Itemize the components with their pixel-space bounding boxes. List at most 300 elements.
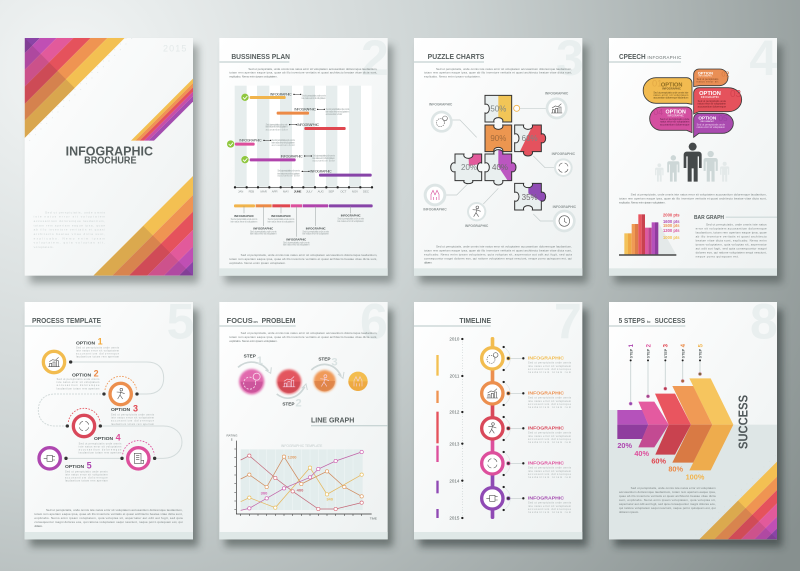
bar graph heading: BAR GRAPH [694, 215, 724, 221]
closing text: consequuntur magni dolores eos, qui ratione voluptatem sequi nesciunt, neque porro quisquam est, qui [424, 256, 572, 260]
speech bubble 2: OPTION [698, 70, 713, 75]
heading: PUZZLE CHARTS [428, 52, 484, 61]
winding path [38, 362, 182, 458]
speech bubble 4: accusantium doloremque [660, 123, 690, 126]
puzzle piece 60% [515, 124, 547, 157]
cover text block: voluptatem. [34, 245, 54, 249]
heading [619, 52, 681, 61]
speech bubble 2 [694, 69, 729, 87]
option 4 text: Sed ut perspiciatis unde omnis [79, 443, 122, 446]
speech bubble 1: accusantium doloremque laudantium [653, 97, 688, 100]
cover title: INFOGRAPHIC [66, 143, 153, 158]
cover text block: voluptatem, quia voluptas sit, [34, 241, 105, 245]
value labels [261, 454, 334, 502]
gantt annotations: accusantium dolor [266, 128, 288, 131]
segmented bar with callouts: INFOGRAPHIC [253, 226, 273, 230]
segmented bar with callouts: INFOGRAPHIC [341, 214, 361, 218]
step pins: 3 [664, 343, 670, 347]
step pins: STEP [629, 348, 633, 358]
option 2 text: iste natus error sit voluptatem [57, 381, 99, 384]
heading: FOCUS [227, 316, 253, 325]
cover text block: accusantium doloremque laudantium, [34, 219, 105, 223]
timeline item 1: accusantium doloremque [528, 368, 572, 371]
puzzle piece 35% [515, 182, 547, 210]
puzzle piece 50%: 50% [490, 105, 506, 114]
month axis: NOV [352, 189, 358, 193]
body text: quae ab illo inventore veritatis et quasi architecto beatae vitae dicta [619, 494, 716, 498]
speech bubble 5: INFOGRAPHIC [700, 120, 715, 123]
heading [227, 316, 295, 325]
timeline item 3: laudantium totam rem [528, 441, 571, 444]
closing text [424, 244, 572, 264]
body text: aspernatur aut odit aut fugit, sed quia consequuntur magni dolores eos, [619, 502, 716, 506]
intro text: explicabo. Nemo enim ipsam voluptatem. [229, 339, 278, 343]
line graph heading [311, 415, 388, 426]
corner stripes [699, 462, 777, 540]
bar chart legend: 1500 pts [663, 223, 680, 228]
speech bubble 4: INFOGRAPHIC [668, 114, 684, 117]
heading: CPEECH [619, 52, 646, 61]
closing text: Sed ut perspiciatis, unde omnis iste natus error sit voluptatem accusantium doloremque laudantium, [241, 253, 377, 257]
speech bubble 5: OPTION [698, 116, 717, 121]
option 4 text: laudantium totam rem aperiam [79, 452, 121, 455]
line graph: $ [231, 438, 233, 442]
cover title: BROCHURE [84, 156, 137, 167]
month axis: JAN [238, 189, 243, 193]
body text: accusantium doloremque laudantium, totam rem aperiam eaque ipsa, [619, 490, 716, 494]
line graph heading: LINE GRAPH [311, 415, 355, 424]
speech bubble 5: natus error sit voluptatem [697, 126, 725, 129]
gantt bars [235, 96, 372, 177]
option 2 text: accusantium doloremque [57, 384, 100, 387]
speech bubble 5: 05 [718, 113, 728, 123]
speech bubble 5: Sed ut perspiciatis unde [697, 123, 726, 126]
icon: gears with label: INFOGRAPHIC [429, 102, 453, 106]
heading: INFOGRAPHIC [647, 55, 681, 60]
bar graph text [696, 223, 767, 259]
intro text: Sed ut perspiciatis, unde omnis iste natus error sit voluptatem accusantium doloremque laudantium, [436, 67, 572, 71]
mid text: explicabo. Nemo enim ipsam voluptatem. [619, 201, 666, 205]
gantt annotations [239, 93, 350, 178]
heading [619, 316, 685, 325]
option 5 text: OPTION [65, 464, 85, 470]
segmented bar with callouts: iste natus error sit voluptatem [268, 220, 294, 223]
timeline item 3: INFOGRAPHIC [528, 426, 565, 431]
segmented bar with callouts: iste natus error sit voluptatem [283, 244, 310, 247]
step labels: STEP [244, 353, 256, 358]
month axis: MAY [283, 189, 289, 193]
option 1 text: 1 [98, 337, 103, 347]
panel: page 8 five steps to success [609, 294, 782, 547]
page number: 8 [750, 294, 778, 350]
year axis: 2010 [449, 337, 460, 342]
puzzle piece 40% [485, 148, 517, 185]
chevron arrows [617, 378, 733, 470]
timeline item 3: accusantium doloremque [528, 438, 572, 441]
page number: 7 [554, 294, 582, 350]
speech bubble 3 [694, 88, 742, 114]
timeline item 2: iste natus error sit voluptatem [528, 400, 571, 403]
bar graph text: beatae vitae dicta sunt, explicabo. Nemo enim [696, 239, 767, 243]
body text [619, 486, 716, 514]
puzzle piece 50% [484, 94, 512, 122]
bar chart legend: 1600 pts [663, 219, 680, 224]
segmented bar with callouts: Sed ut perspiciatis unde omnis [268, 218, 295, 221]
segmented bar with callouts: INFOGRAPHIC [271, 214, 291, 218]
gantt annotations: Sed ut perspiciatis unde omnis [326, 108, 350, 111]
month axis: JULY [306, 189, 313, 193]
closing text: explicabo. Nemo enim ipsam voluptatem, quia voluptas sit, aspernatur aut odit aut fugit, sed quia [424, 252, 572, 256]
closing text [229, 253, 377, 265]
puzzle piece 20% [451, 153, 483, 184]
check icons [227, 94, 249, 163]
step pins: 5 [698, 343, 704, 347]
puzzle piece 90% [485, 125, 512, 152]
timeline item 5: iste natus error sit voluptatem [528, 505, 571, 508]
gantt annotations: iste natus error sit voluptatem [326, 111, 349, 114]
page number: 3 [556, 30, 584, 86]
mid text: Sed ut perspiciatis, unde omnis iste natus error sit voluptatem accusantium doloremque laudantium, [631, 193, 767, 197]
cover text block: totam rem aperiam eaque ipsa, quae [34, 223, 105, 227]
segmented bar with callouts: Sed ut perspiciatis unde omnis [283, 241, 310, 244]
speech bubble 1: OPTION [661, 82, 683, 88]
puzzle piece 35%: 35% [522, 193, 538, 202]
intro text: explicabo. Nemo enim ipsam voluptatem. [424, 75, 481, 79]
option 2 text: 2 [94, 368, 99, 378]
option 5 text: Sed ut perspiciatis unde omnis [65, 471, 108, 474]
closing text: totam rem aperiam eaque ipsa, quae ab illo inventore veritatis et quasi architecto beatae vitae dicta sunt, [424, 248, 572, 252]
option 4 text [79, 432, 122, 455]
gantt annotations: Sed ut perspiciatis unde omnis [272, 139, 296, 142]
year axis: 2014 [449, 478, 460, 483]
year axis: 2015 [449, 516, 460, 521]
intro text: totam rem aperiam eaque ipsa, quae ab illo inventore veritatis et quasi architecto beatae vitae dicta sunt, [424, 71, 572, 75]
option 1 text: OPTION [76, 340, 96, 346]
heading: PROCESS TEMPLATE [32, 316, 101, 325]
page number: 4 [749, 30, 777, 86]
bar chart legend: 2000 pts [663, 212, 680, 217]
value labels: 1200 [288, 454, 297, 459]
option 3 text: laudantium totam rem aperiam [111, 423, 154, 426]
timeline item 1: laudantium totam rem [528, 371, 571, 374]
step labels [244, 353, 338, 409]
gantt annotations: iste natus error sit voluptatem [266, 126, 288, 129]
gantt annotations: INFOGRAPHIC [310, 169, 332, 173]
speech bubble 3: OPTION [699, 91, 721, 97]
timeline item 4: INFOGRAPHIC [528, 461, 565, 466]
option 2 text: OPTION [72, 372, 92, 378]
option 3 text: OPTION [111, 407, 131, 413]
page number: 5 [167, 294, 194, 350]
icon: chart with label [545, 92, 569, 119]
right mid stripe [131, 79, 193, 141]
bar graph text: aut odit aut fugit, sed quia consequuntur magni [696, 247, 767, 251]
timeline item 3 [482, 416, 572, 444]
timeline item 5: accusantium doloremque [528, 508, 572, 511]
panel: page 1 cover [25, 38, 198, 283]
option 4 text: 4 [116, 432, 121, 442]
option 2 text: laudantium totam rem aperiam [57, 387, 99, 390]
speech bubble 4 [650, 107, 692, 133]
speech bubble 3: Sed ut perspiciatis unde [698, 100, 727, 103]
percent labels: 100% [686, 472, 705, 481]
bar graph text: neque porro quisquam est. [696, 255, 739, 259]
speech bubble 1: 01 [652, 79, 662, 89]
gantt annotations: accusantium dolor [272, 144, 295, 147]
year axis: 2011 [450, 374, 460, 379]
intro text: totam rem aperiam eaque ipsa, quae ab illo inventore veritatis et quasi architecto beatae vitae dicta sunt, [229, 71, 377, 75]
line graph: TIME [370, 517, 377, 521]
closing text: totam rem aperiam eaque ipsa, quae ab illo inventore veritatis et quasi architecto beatae vitae dicta sunt, [34, 512, 183, 516]
segmented bar with callouts: iste natus error sit voluptatem [337, 220, 364, 223]
month axis: AUG [318, 189, 324, 193]
option 3 text: accusantium doloremque [111, 420, 155, 423]
icon: gears with label [429, 102, 453, 133]
page number: 2 [361, 30, 389, 86]
step labels: STEP [318, 357, 331, 362]
year: 2015 [163, 43, 186, 53]
intro text [424, 67, 572, 79]
gantt annotations: accusantium dolor [312, 160, 335, 163]
icon: clock with label [553, 205, 577, 232]
page number: 6 [360, 294, 388, 350]
percent labels: 40% [634, 449, 649, 458]
gantt annotations: INFOGRAPHIC [297, 123, 319, 127]
step pins: STEP [681, 348, 685, 358]
closing text: consequuntur magni dolores eos, qui ratione voluptatem sequi nesciunt, neque porro quisquam est, qui [34, 520, 183, 524]
heading: to [647, 320, 651, 324]
option 3 text: iste natus error sit voluptatem [111, 417, 154, 420]
timeline item 4: iste natus error sit voluptatem [528, 470, 571, 473]
segmented bar with callouts: iste natus error sit voluptatem [231, 220, 257, 223]
segmented bar with callouts: INFOGRAPHIC [286, 237, 306, 241]
gantt annotations: INFOGRAPHIC [270, 93, 292, 97]
option 2 circle [105, 376, 137, 405]
segmented bar with callouts: Sed ut perspiciatis unde omnis [231, 218, 258, 221]
timeline item 4: laudantium totam rem [528, 476, 571, 479]
closing text: dolorem. [34, 524, 43, 528]
line graph: RATING [226, 433, 238, 437]
gantt annotations: iste natus error sit voluptatem [302, 97, 326, 100]
timeline item 1 [482, 346, 572, 374]
panel: page 6 focus on problem [219, 294, 393, 547]
timeline item 1: Sed ut perspiciatis unde omnis [528, 361, 572, 364]
option 5 text [65, 460, 108, 483]
heading: on [253, 320, 258, 324]
year axis [449, 337, 463, 521]
gantt annotations: INFOGRAPHIC [294, 108, 316, 112]
month axis: APR [272, 189, 278, 193]
option 5 text: laudantium totam rem aperiam [65, 480, 108, 483]
closing text: explicabo. Nemo enim ipsam voluptatem. [229, 261, 286, 265]
timeline item 2: INFOGRAPHIC [528, 391, 565, 396]
option 5 text: iste natus error sit voluptatem [65, 474, 108, 477]
speech bubble 1 [643, 78, 692, 104]
intro text: Sed ut perspiciatis, unde omnis iste natus error sit voluptatem accusantium doloremque laudantium, [248, 67, 377, 71]
timeline item 4 [482, 451, 572, 479]
body text: dolorem ipsum. [619, 510, 639, 514]
option 1 text: iste natus error sit voluptatem [76, 349, 119, 352]
gantt annotations: Sed ut perspiciatis unde omnis [277, 170, 301, 173]
closing text: totam rem aperiam eaque ipsa, quae ab illo inventore veritatis et quasi architecto beatae vitae dicta sunt, [229, 257, 377, 261]
cover text block [34, 210, 105, 249]
segmented bar with callouts: Sed ut perspiciatis unde omnis [337, 218, 365, 221]
people icons [655, 143, 729, 182]
body text: Sed ut perspiciatis, unde omnis iste natus error sit voluptatem [631, 486, 716, 490]
body text: qui ratione voluptatem sequi nesciunt, neque porro quisquam est, qui [619, 506, 716, 510]
cover text block: Sed ut perspiciatis, unde omnis [45, 210, 105, 214]
icon: clock with label: INFOGRAPHIC [553, 205, 577, 209]
bottom-right colour stripes [93, 176, 193, 276]
speech bubble 3: accusantium doloremque [698, 105, 727, 108]
bar graph text: dolores eos, qui ratione voluptatem sequi nesciunt, [696, 251, 767, 255]
gantt annotations: INFOGRAPHIC [239, 138, 262, 142]
bar graph text: ipsam voluptatem, quia voluptas sit, aspernatur [696, 243, 767, 247]
heading: TIMELINE [459, 316, 491, 325]
closing text [34, 508, 183, 528]
option 4 text: iste natus error sit voluptatem [79, 446, 121, 449]
top-left colour stripes [24, 38, 132, 141]
puzzle piece 90%: 90% [490, 134, 506, 143]
timeline item 2: accusantium doloremque [528, 403, 572, 406]
value labels: 340 [326, 497, 334, 502]
segmented bar with callouts [231, 204, 373, 247]
gantt annotations: iste natus error sit voluptatem [272, 142, 295, 145]
period bars [436, 355, 439, 518]
option 1 text: laudantium totam rem aperiam [76, 355, 119, 358]
segmented bar with callouts: INFOGRAPHIC [234, 214, 254, 218]
body text: sunt, explicabo. Nemo enim ipsam voluptatem, quia voluptas sit, [619, 498, 716, 502]
heading: BUSSINESS PLAN [231, 52, 290, 61]
vertical connector [491, 337, 494, 519]
puzzle piece 20%: 20% [461, 163, 477, 172]
month axis: MAR [261, 189, 267, 193]
gantt annotations: Sed ut perspiciatis unde omnis [312, 155, 336, 158]
month axis [234, 186, 373, 193]
heading: PROBLEM [262, 316, 295, 325]
speech bubble 1: INFOGRAPHIC [662, 87, 681, 91]
timeline item 4: Sed ut perspiciatis unde omnis [528, 466, 572, 469]
option 4 circle [123, 441, 154, 469]
intro text [229, 331, 377, 343]
speech bubble 4: 04 [653, 107, 663, 117]
leader lines [445, 108, 554, 221]
option 1 text: accusantium doloremque [76, 352, 120, 355]
speech bubble 1: natus error sit voluptatem [653, 94, 688, 97]
option 4 text: OPTION [94, 436, 114, 442]
closing text: explicabo. Nemo enim ipsam voluptatem, quia voluptas sit, aspernatur aut odit aut fugit, sed quia [34, 516, 183, 520]
bar graph text: Sed ut perspiciatis, unde omnis iste natus [706, 223, 767, 227]
option 3 text: 3 [133, 403, 138, 413]
puzzle piece 60%: 60% [522, 134, 538, 143]
speech bubble 2: Sed ut perspiciatis [697, 78, 719, 81]
bar chart legend: 1000 pts [663, 235, 680, 240]
mid text: totam rem aperiam eaque ipsa, quae ab illo inventore veritatis et quasi architecto beatae vitae dicta sunt, [619, 197, 767, 201]
heading: 5 STEPS [619, 316, 645, 325]
step labels: STEP [282, 402, 295, 407]
percent labels: 20% [617, 441, 632, 450]
speech bubble 2: natus error sit [697, 81, 719, 84]
timeline item 5: Sed ut perspiciatis unde omnis [528, 501, 572, 504]
cover text block: ab illo inventore veritatis et quasi [34, 228, 105, 232]
closing text: Sed ut perspiciatis, unde omnis iste natus error sit voluptatem accusantium doloremque laudantium, [46, 508, 183, 512]
icon: hands with label: INFOGRAPHIC [423, 208, 447, 212]
timeline item 1: INFOGRAPHIC [528, 356, 565, 361]
bar chart [619, 214, 676, 256]
icon: runner with label [465, 202, 489, 228]
gantt annotations: accusantium dolor [326, 113, 343, 116]
icon: cycle with label: INFOGRAPHIC [552, 152, 576, 156]
timeline item 4: accusantium doloremque [528, 473, 572, 476]
panel: page 2 business plan [219, 30, 393, 283]
segmented bar with callouts: iste natus error sit voluptatem [302, 233, 329, 236]
bar graph heading [694, 215, 777, 221]
speech bubble 3: natus error sit voluptatem [698, 103, 726, 106]
step pins: 1 [629, 343, 635, 347]
gantt annotations: iste natus error sit voluptatem [277, 172, 300, 175]
step labels: 3 [331, 356, 338, 368]
segmented bar with callouts: Sed ut perspiciatis unde omnis [250, 230, 277, 233]
timeline item 5: INFOGRAPHIC [528, 496, 565, 501]
speech bubble 3: 03 [730, 89, 742, 100]
intro text: Sed ut perspiciatis, unde omnis iste natus error sit voluptatem accusantium doloremque laudantium, [241, 331, 377, 335]
option 1 text: Sed ut perspiciatis unde omnis [76, 347, 120, 350]
percent labels [617, 441, 705, 481]
closing text: dolorem. [424, 260, 432, 264]
gantt annotations: iste natus error sit voluptatem [312, 157, 335, 160]
option 4 text: accusantium doloremque [79, 449, 122, 452]
option 1 text [76, 337, 120, 358]
heading: SUCCESS [655, 316, 685, 325]
option 3 text [111, 403, 155, 426]
intro text: totam rem aperiam eaque ipsa, quae ab illo inventore veritatis et quasi architecto beatae vitae dicta sunt, [229, 335, 377, 339]
timeline item 2: laudantium totam rem [528, 406, 571, 409]
path nodes [64, 360, 156, 460]
icon: hands with label [423, 184, 447, 212]
panel: page 3 puzzle charts [414, 30, 588, 283]
option 3 text: Sed ut perspiciatis unde omnis [111, 414, 155, 417]
bar chart legend [663, 212, 680, 240]
step pins: 2 [646, 343, 652, 347]
gantt chart [227, 86, 373, 193]
segmented bar with callouts: INFOGRAPHIC [306, 226, 326, 230]
timeline item 2 [482, 381, 572, 409]
speech bubble 2: 02 [721, 70, 729, 79]
cover text block: architecto beatae vitae dicta sunt, [34, 232, 105, 236]
month axis: SEP [328, 189, 334, 193]
timeline item 3: iste natus error sit voluptatem [528, 435, 571, 438]
percent labels: 60% [651, 457, 666, 466]
segmented bar with callouts: Sed ut perspiciatis unde omnis [302, 230, 330, 233]
cover text block: iste natus error sit voluptatem [34, 215, 105, 219]
step labels: 2 [295, 397, 302, 409]
speech bubble 2: INFOGRAPHIC [698, 75, 713, 78]
panel: page 7 timeline [414, 294, 588, 547]
mid text [619, 193, 767, 205]
speech bubble 4: OPTION [665, 110, 686, 116]
bar graph text: laudantium, totam rem aperiam eaque ipsa, quae [696, 231, 767, 235]
closing text: Sed ut perspiciatis, unde omnis iste natus error sit voluptatem accusantium doloremque laudantium, [436, 244, 572, 248]
speech bubble 1: Sed ut perspiciatis unde omnis iste [653, 91, 689, 94]
month axis: OCT [340, 189, 347, 193]
series lines [241, 452, 362, 510]
value labels: 400 [297, 488, 304, 493]
gantt annotations: Sed ut perspiciatis unde omnis [266, 123, 288, 126]
panel: page 4 speech infographic [609, 30, 782, 283]
intro text: explicabo. Nemo enim ipsam voluptatem. [229, 75, 278, 79]
timeline item 2: Sed ut perspiciatis unde omnis [528, 396, 572, 399]
line graph: INFOGRAPHIC TEMPLATE [281, 444, 323, 448]
